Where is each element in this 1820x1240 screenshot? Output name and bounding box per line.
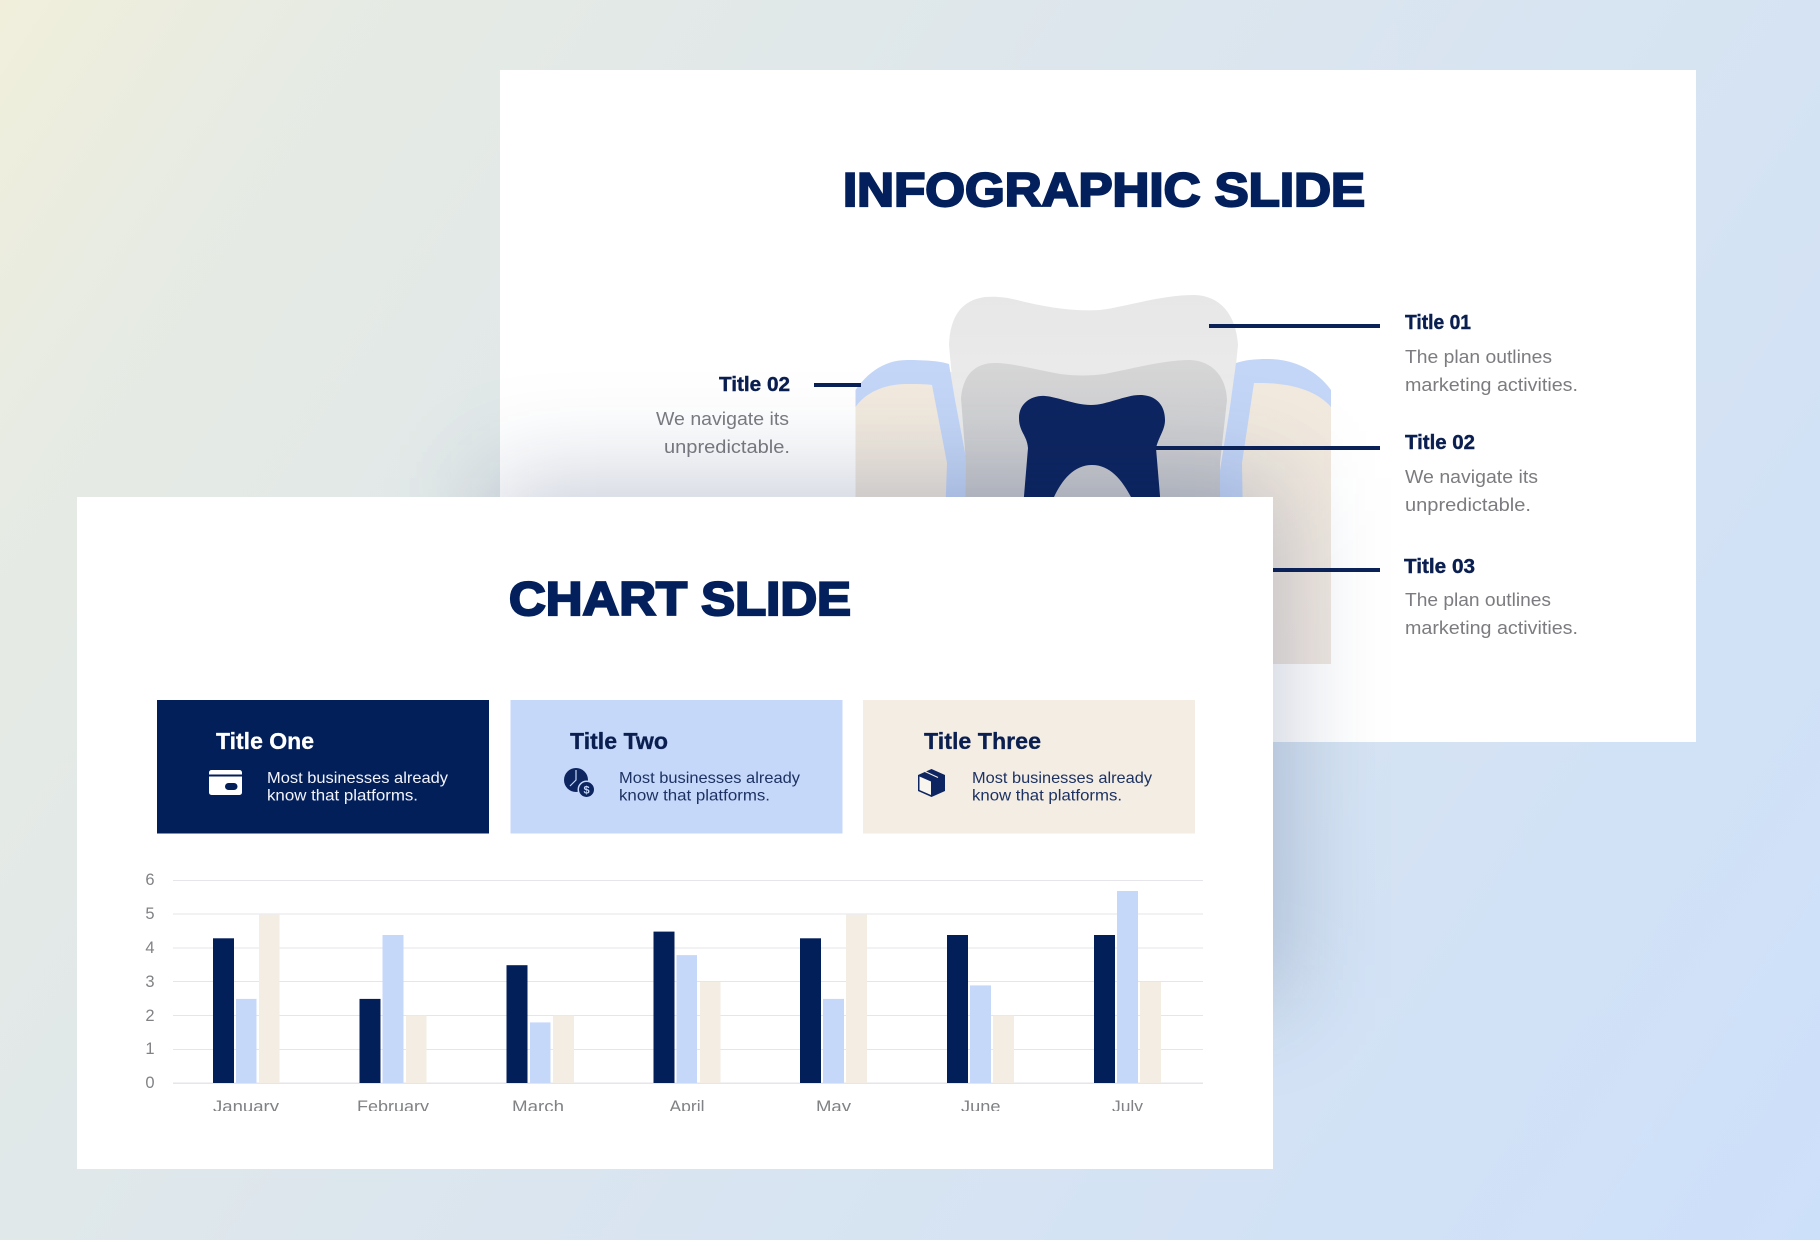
leader line title 02 right (1156, 446, 1380, 450)
y-axis labels: 1 (145, 1040, 155, 1058)
card: title one: Most businesses already (267, 770, 448, 787)
leader line title 01 (1209, 324, 1380, 328)
label: title 03: The plan outlines (1405, 589, 1551, 610)
card: title one (157, 700, 489, 834)
label: title 03 (1404, 556, 1578, 638)
icon: wallet (209, 770, 242, 795)
bone left and right (856, 372, 1331, 664)
label: title 03: marketing activities. (1405, 617, 1578, 638)
icon: clock with dollar: $ (583, 784, 590, 796)
card: title three: Most businesses already (972, 770, 1152, 787)
gum right (1219, 359, 1331, 520)
label: title 02 right (1405, 432, 1538, 515)
title: infographic slide: INFOGRAPHIC SLIDE (843, 164, 1365, 217)
label: title 01: The plan outlines (1405, 346, 1552, 367)
label: title 02 left (656, 374, 790, 457)
series: beige bars (259, 915, 1161, 1083)
card: title three (863, 700, 1195, 834)
series: light blue bars (236, 891, 1138, 1083)
y-axis labels: 6 (145, 871, 155, 889)
gum left (856, 360, 967, 520)
title: chart slide: CHART SLIDE (509, 573, 851, 626)
icon: box (918, 769, 945, 797)
front slide shadow (490, 478, 1285, 998)
y-axis labels: 0 (145, 1074, 155, 1092)
x-axis month labels: March (512, 1098, 564, 1116)
x-axis month labels: April (670, 1098, 704, 1116)
label: title 02 right: unpredictable. (1405, 494, 1531, 515)
panel: chart slide (77, 497, 1273, 1169)
card: title two: Title Two (570, 728, 668, 754)
x-axis month labels: June (961, 1098, 1000, 1116)
leader line title 03 (1270, 568, 1380, 572)
card: title three: Title Three (924, 728, 1041, 754)
label: title 01: marketing activities. (1405, 374, 1578, 395)
crown (949, 295, 1238, 520)
x-axis month labels: January (213, 1098, 280, 1116)
label: title 02 right: Title 02 (1405, 432, 1475, 454)
bar chart (145, 871, 1203, 1116)
x-axis month labels: February (357, 1098, 430, 1116)
leader line title 02 left (814, 383, 861, 387)
label: title 02 right: We navigate its (1405, 466, 1538, 487)
series: navy bars (213, 932, 1115, 1083)
y-axis labels: 3 (145, 973, 155, 991)
label: title 02 left: unpredictable. (664, 436, 790, 457)
label: title 03: Title 03 (1404, 556, 1475, 578)
x-axis month labels: July (1112, 1098, 1144, 1116)
label: title 02 left: We navigate its (656, 408, 789, 429)
icon: clock with dollar (564, 768, 596, 798)
label: title 02 left: Title 02 (719, 374, 790, 396)
card: title two (510, 700, 842, 834)
card: title two: Most businesses already (619, 770, 800, 787)
card: title three: know that platforms. (972, 788, 1122, 804)
label: title 01: Title 01 (1405, 312, 1471, 334)
card: title one: know that platforms. (267, 788, 418, 804)
y-axis labels: 5 (145, 905, 155, 923)
label: title 01 (1405, 312, 1578, 395)
y-axis labels (145, 871, 155, 1092)
x-axis month labels: May (816, 1098, 852, 1116)
x-axis month labels (213, 1100, 1143, 1111)
tooth illustration (856, 295, 1331, 664)
y-axis labels: 2 (145, 1007, 155, 1025)
dentin (961, 360, 1227, 520)
card: title one: Title One (216, 728, 314, 754)
pulp (1019, 395, 1165, 520)
y-axis labels: 4 (145, 939, 155, 957)
card: title two: know that platforms. (619, 788, 770, 804)
panel: infographic slide (500, 70, 1696, 742)
